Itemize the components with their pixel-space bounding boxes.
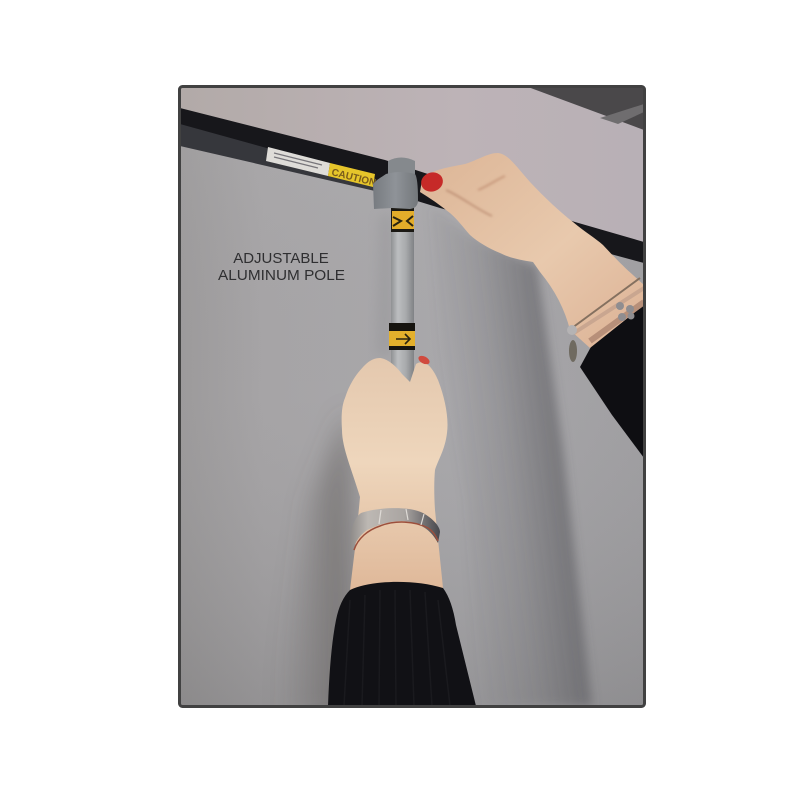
photo frame: [180, 86, 644, 706]
lower hand nail: [418, 356, 430, 364]
top hand nail: [421, 172, 443, 192]
top hand: [420, 153, 644, 348]
ceiling: [528, 87, 644, 130]
lower wall: [181, 146, 643, 705]
black rail: [180, 108, 644, 263]
heading: adjustable aluminum pole: ADJUSTABLE: [233, 250, 329, 267]
lower sleeve: [328, 582, 476, 706]
upper yellow sticker: [391, 207, 414, 232]
lower hand: [342, 358, 448, 590]
caution label: CAUTION: [330, 167, 377, 189]
caution label: [266, 147, 377, 189]
upper wall: [180, 87, 644, 245]
right sleeve: [580, 305, 644, 458]
photo panel: [180, 87, 644, 720]
lower yellow sticker with arrow: [389, 323, 415, 350]
heading: adjustable aluminum pole: ALUMINUM POLE: [218, 267, 345, 284]
aluminum pole: [391, 232, 414, 382]
silver bracelet: [350, 508, 440, 550]
rail lower edge: [180, 124, 375, 191]
photo infographic: [178, 85, 646, 708]
hand shadows: [275, 205, 592, 720]
gray clamp: [373, 158, 418, 209]
charm bracelets: [567, 278, 644, 362]
heading: adjustable aluminum pole: [218, 250, 345, 284]
